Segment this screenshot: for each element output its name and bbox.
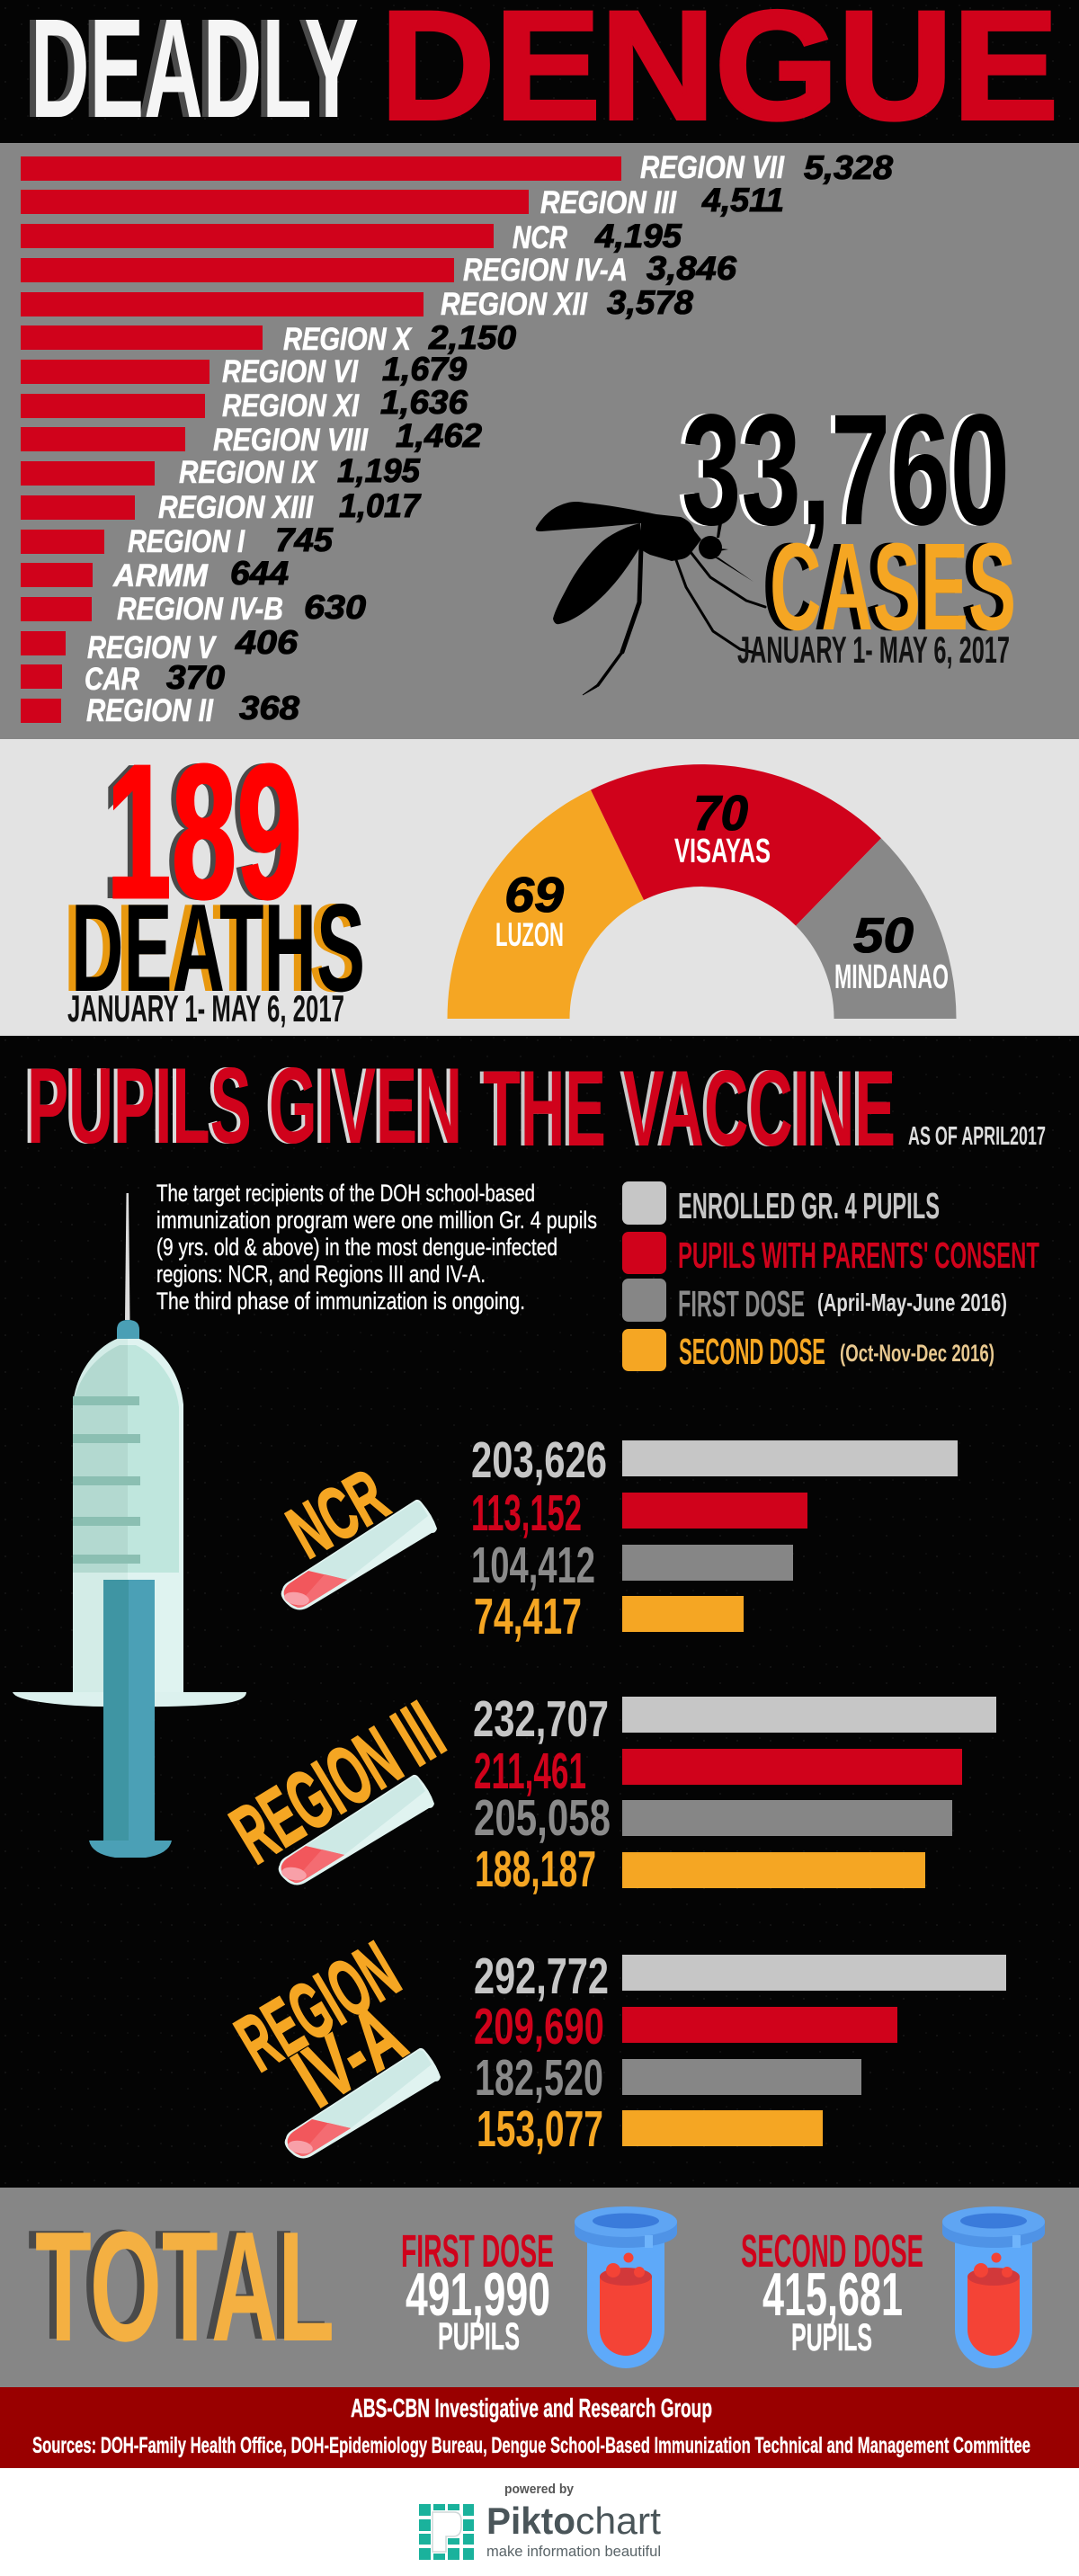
bar chart: cases by region: REGION III	[540, 185, 677, 220]
chart: deaths by island group	[448, 764, 957, 1019]
bar chart: cases by region: 1,636	[380, 384, 468, 421]
stat: second dose	[741, 2225, 923, 2359]
icon: blood vial second dose	[942, 2206, 1045, 2368]
bar chart: cases by region: 1,017	[339, 487, 422, 524]
bars: ncr	[471, 1431, 958, 1645]
stat: second dose: 415,681	[762, 2260, 903, 2329]
label: region iv-a	[222, 1925, 420, 2125]
bar chart: cases by region: REGION XII	[441, 287, 588, 322]
stat: 189	[101, 725, 302, 938]
bar chart: cases by region: NCR	[513, 220, 568, 255]
bar chart: cases by region: 3,578	[607, 284, 693, 321]
segment: luzon: LUZON	[495, 916, 564, 953]
legend: SECOND DOSE	[679, 1331, 825, 1372]
icon: mosquito	[536, 502, 765, 695]
stat label: deaths: DEATHS	[64, 878, 358, 1018]
group: ncr	[274, 1431, 958, 1645]
bars: region iv-a	[474, 1948, 1006, 2158]
bar chart: cases by region: 1,195	[337, 452, 421, 489]
bars: region iii: 205,058	[474, 1789, 611, 1847]
bar chart: cases by region: REGION X	[283, 322, 413, 357]
heading: pupils given the vaccine: PUPILS GIVEN	[23, 1046, 459, 1166]
icon: piktochart logo	[419, 2504, 474, 2560]
logotype: piktochart: chart	[575, 2500, 661, 2542]
stat: 189: 189	[101, 725, 297, 938]
bar chart: cases by region: REGION I	[128, 524, 245, 559]
bars: region iii	[473, 1690, 996, 1898]
bars: region iii: 211,461	[474, 1743, 586, 1800]
bar chart: cases by region: REGION IX	[179, 455, 318, 490]
bar chart: cases by region: 644	[230, 555, 289, 592]
bars: region iii: 188,187	[475, 1841, 596, 1898]
bar chart: cases by region: REGION VII	[640, 150, 785, 185]
panel: piktochart footer	[0, 2468, 1079, 2576]
icon: test tube region iv-a	[285, 2048, 441, 2158]
heading: total: TOTAL	[28, 2197, 327, 2372]
icon: test tube ncr	[281, 1500, 437, 1609]
bars: ncr: 104,412	[471, 1537, 595, 1594]
label: region iv-a: IV-A	[278, 1987, 420, 2125]
heading: total	[28, 2197, 334, 2374]
legend: (Oct-Nov-Dec 2016)	[840, 1340, 994, 1367]
stat: first dose	[401, 2225, 554, 2358]
group: region iii	[216, 1684, 996, 1898]
segment: mindanao	[796, 838, 957, 1019]
bar chart: cases by region: CAR	[85, 662, 140, 697]
text block: program description: (9 yrs. old & above) in the most dengue-infected	[156, 1234, 557, 1261]
date range: deaths: JANUARY 1- MAY 6, 2017	[67, 987, 344, 1030]
credit line: ABS-CBN Investigative and Research Group	[351, 2394, 712, 2423]
segment: mindanao: 50	[853, 907, 914, 963]
heading: total: TOTAL	[35, 2198, 334, 2374]
bar chart: cases by region: 406	[235, 624, 298, 661]
bar chart: cases by region: 370	[166, 659, 225, 696]
bars: region iv-a: 292,772	[474, 1948, 609, 2005]
segment: luzon	[448, 789, 644, 1019]
bar chart: cases by region: REGION IV-A	[463, 253, 628, 288]
stat: 189: 189	[106, 725, 302, 938]
bar chart: cases by region: REGION XIII	[158, 490, 314, 525]
text block: program description: regions: NCR, and Regions III and IV-A.	[156, 1261, 486, 1288]
bars: region iv-a: 209,690	[474, 1998, 604, 2055]
segment: luzon: 69	[504, 867, 564, 923]
bars: ncr: 74,417	[474, 1588, 582, 1645]
group: region iv-a	[222, 1925, 1006, 2158]
stat: first dose: FIRST DOSE	[401, 2225, 554, 2277]
segment: visayas	[591, 764, 881, 926]
tagline: make information beautiful	[486, 2543, 661, 2560]
logotype: piktochart	[486, 2500, 661, 2542]
bars: ncr: 203,626	[471, 1431, 607, 1489]
panel: title	[0, 0, 1079, 152]
bar chart: cases by region	[21, 149, 893, 728]
panel: total	[0, 2188, 1079, 2387]
label: region iii: REGION III	[216, 1684, 459, 1881]
panel: dengue cases by region	[0, 143, 1079, 739]
text block: program description	[156, 1180, 597, 1315]
legend: FIRST DOSE	[678, 1283, 805, 1324]
stat: second dose: PUPILS	[791, 2316, 872, 2359]
bar chart: cases by region: 1,462	[396, 417, 482, 454]
bar chart: cases by region: REGION V	[87, 630, 217, 665]
legend: (April-May-June 2016)	[817, 1288, 1007, 1316]
bar chart: cases by region: REGION VI	[222, 354, 359, 389]
bars: region iv-a: 153,077	[477, 2100, 603, 2158]
bar chart: cases by region: 3,846	[647, 250, 736, 287]
segment: visayas: 70	[693, 785, 748, 841]
segment: visayas: VISAYAS	[674, 833, 771, 870]
heading: deadly	[24, 0, 359, 147]
heading: pupils given the vaccine: PUPILS GIVEN	[27, 1046, 462, 1166]
icon: test tube region iii	[279, 1775, 434, 1885]
stat: first dose: 491,990	[406, 2260, 550, 2329]
bar chart: cases by region: 2,150	[428, 319, 516, 356]
bar chart: cases by region: ARMM	[112, 558, 209, 593]
bar chart: cases by region: 4,195	[594, 218, 682, 254]
bar chart: cases by region: REGION VIII	[213, 423, 369, 458]
bar chart: cases by region: 368	[239, 690, 299, 726]
text block: program description: immunization program were one million Gr. 4 pupils	[156, 1207, 597, 1234]
icon: syringe	[13, 1193, 246, 1858]
stat label: deaths	[64, 878, 365, 1018]
bar chart: cases by region: REGION XI	[222, 388, 360, 423]
legend	[622, 1181, 1039, 1372]
panel: pupils given the vaccine	[0, 1036, 1079, 2188]
segment: mindanao: MINDANAO	[834, 958, 949, 996]
bar chart: cases by region: REGION II	[86, 693, 214, 728]
text block: program description: The target recipients of the DOH school-based	[156, 1180, 535, 1207]
bars: region iv-a: 182,520	[475, 2049, 603, 2107]
text: powered by: powered by	[504, 2482, 575, 2497]
bars: ncr: 113,152	[471, 1484, 582, 1542]
bars: region iii: 232,707	[473, 1690, 609, 1748]
panel: credits	[0, 2387, 1079, 2468]
stat: first dose: PUPILS	[438, 2315, 520, 2358]
stat label: deaths: DEATHS	[71, 878, 365, 1018]
bar chart: cases by region: 630	[304, 589, 366, 626]
label: ncr: NCR	[274, 1453, 401, 1574]
bar chart: cases by region: REGION IV-B	[117, 592, 283, 627]
panel: deaths	[0, 725, 1079, 1036]
label: region iv-a: REGION	[222, 1925, 414, 2089]
text block: program description: The third phase of immunization is ongoing.	[156, 1288, 525, 1315]
icon: blood vial first dose	[575, 2206, 677, 2368]
bar chart: cases by region: 4,511	[701, 182, 784, 218]
bar chart: cases by region: 5,328	[804, 149, 893, 186]
stat: second dose: SECOND DOSE	[741, 2225, 923, 2277]
bar chart: cases by region: 745	[275, 521, 334, 558]
bar chart: cases by region: 1,679	[382, 351, 467, 388]
logotype: piktochart: Pikto	[486, 2500, 575, 2542]
